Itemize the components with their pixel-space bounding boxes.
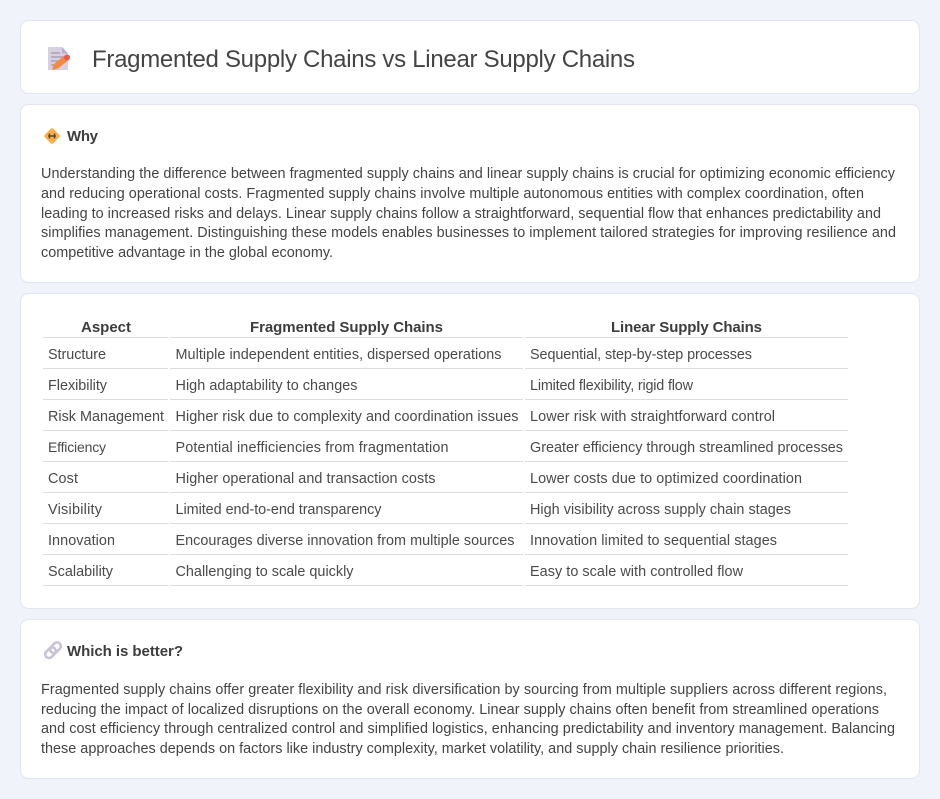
table header: Linear Supply Chains (611, 319, 762, 336)
panel: why (20, 104, 920, 282)
row: scalability: Scalability (48, 564, 114, 580)
table header: Fragmented Supply Chains (250, 319, 443, 336)
row: scalability: Easy to scale with controlled flow (530, 564, 744, 580)
why body text: and reducing operational costs. Fragmented supply chains involve multiple autonomous entities with complex coordination, often (41, 186, 864, 202)
row: flexibility: High adaptability to changes (176, 378, 358, 394)
why body text (41, 166, 896, 261)
row: risk management: Lower risk with straightforward control (530, 409, 775, 425)
icon: document with pencil (48, 47, 70, 70)
title text: Fragmented Supply Chains vs Linear Supply Chains (92, 46, 635, 73)
which is better body text: reducing the impact of localized disruptions on the overall economy. Linear supply chains often benefit from streamlined operations (41, 702, 879, 718)
heading: why: Why (67, 128, 99, 145)
icon: chain link (44, 641, 62, 660)
table header (81, 319, 762, 336)
row: efficiency: Potential inefficiencies from fragmentation (176, 440, 448, 456)
row: innovation: Encourages diverse innovation from multiple sources (176, 533, 514, 549)
icon: warning diamond (44, 128, 60, 144)
row: risk management: Risk Management (48, 409, 164, 425)
row: cost (48, 471, 802, 487)
row: flexibility (48, 378, 694, 394)
table header: Aspect (81, 319, 131, 336)
row: cost: Higher operational and transaction costs (176, 471, 436, 487)
row: efficiency: Greater efficiency through streamlined processes (530, 440, 843, 456)
row: scalability (48, 564, 744, 580)
row: structure: Structure (48, 347, 106, 363)
row: structure (48, 347, 752, 363)
row: flexibility: Limited flexibility, rigid flow (530, 378, 694, 394)
row: cost: Lower costs due to optimized coordination (530, 471, 802, 487)
row: visibility (48, 502, 791, 518)
row: visibility: Limited end-to-end transparency (176, 502, 382, 518)
row: structure: Multiple independent entities, dispersed operations (176, 347, 502, 363)
row: flexibility: Flexibility (48, 378, 108, 394)
row: visibility: High visibility across supply chain stages (530, 502, 791, 518)
why body text: Understanding the difference between fragmented supply chains and linear supply chains is crucial for optimizing economic efficiency (41, 166, 896, 182)
panel: title (20, 20, 920, 94)
row: innovation: Innovation limited to sequential stages (530, 533, 777, 549)
row: innovation (48, 533, 777, 549)
why body text: competitive advantage in the global economy. (41, 245, 333, 261)
row: innovation: Innovation (48, 533, 115, 549)
panel: comparison table (20, 294, 920, 608)
panel: which is better (20, 620, 920, 778)
row: efficiency: Efficiency (48, 439, 106, 455)
which is better body text (41, 682, 895, 757)
why body text: simplifies management. Distinguishing these models enables businesses to implement tailored strategies for improving resilience and (41, 225, 896, 241)
row: visibility: Visibility (48, 502, 103, 518)
row: structure: Sequential, step-by-step processes (530, 347, 752, 363)
which is better body text: these approaches depends on factors like industry complexity, market volatility, and supply chain resilience priorities. (41, 741, 784, 757)
why body text: leading to increased risks and delays. Linear supply chains follow a straightforward, sequential flow that enhances predictability and (41, 206, 881, 222)
row: cost: Cost (48, 471, 78, 487)
row: scalability: Challenging to scale quickly (176, 564, 354, 580)
row: efficiency (48, 439, 843, 456)
heading: which is better: Which is better? (67, 643, 183, 660)
which is better body text: and cost efficiency through centralized control and simplified logistics, enhancing predictability and inventory management. Balancing (41, 721, 895, 737)
row: risk management: Higher risk due to complexity and coordination issues (176, 409, 518, 425)
row: risk management (48, 409, 775, 425)
table grid lines (43, 338, 848, 586)
which is better body text: Fragmented supply chains offer greater flexibility and risk diversification by sourcing from multiple suppliers across different regions, (41, 682, 887, 698)
